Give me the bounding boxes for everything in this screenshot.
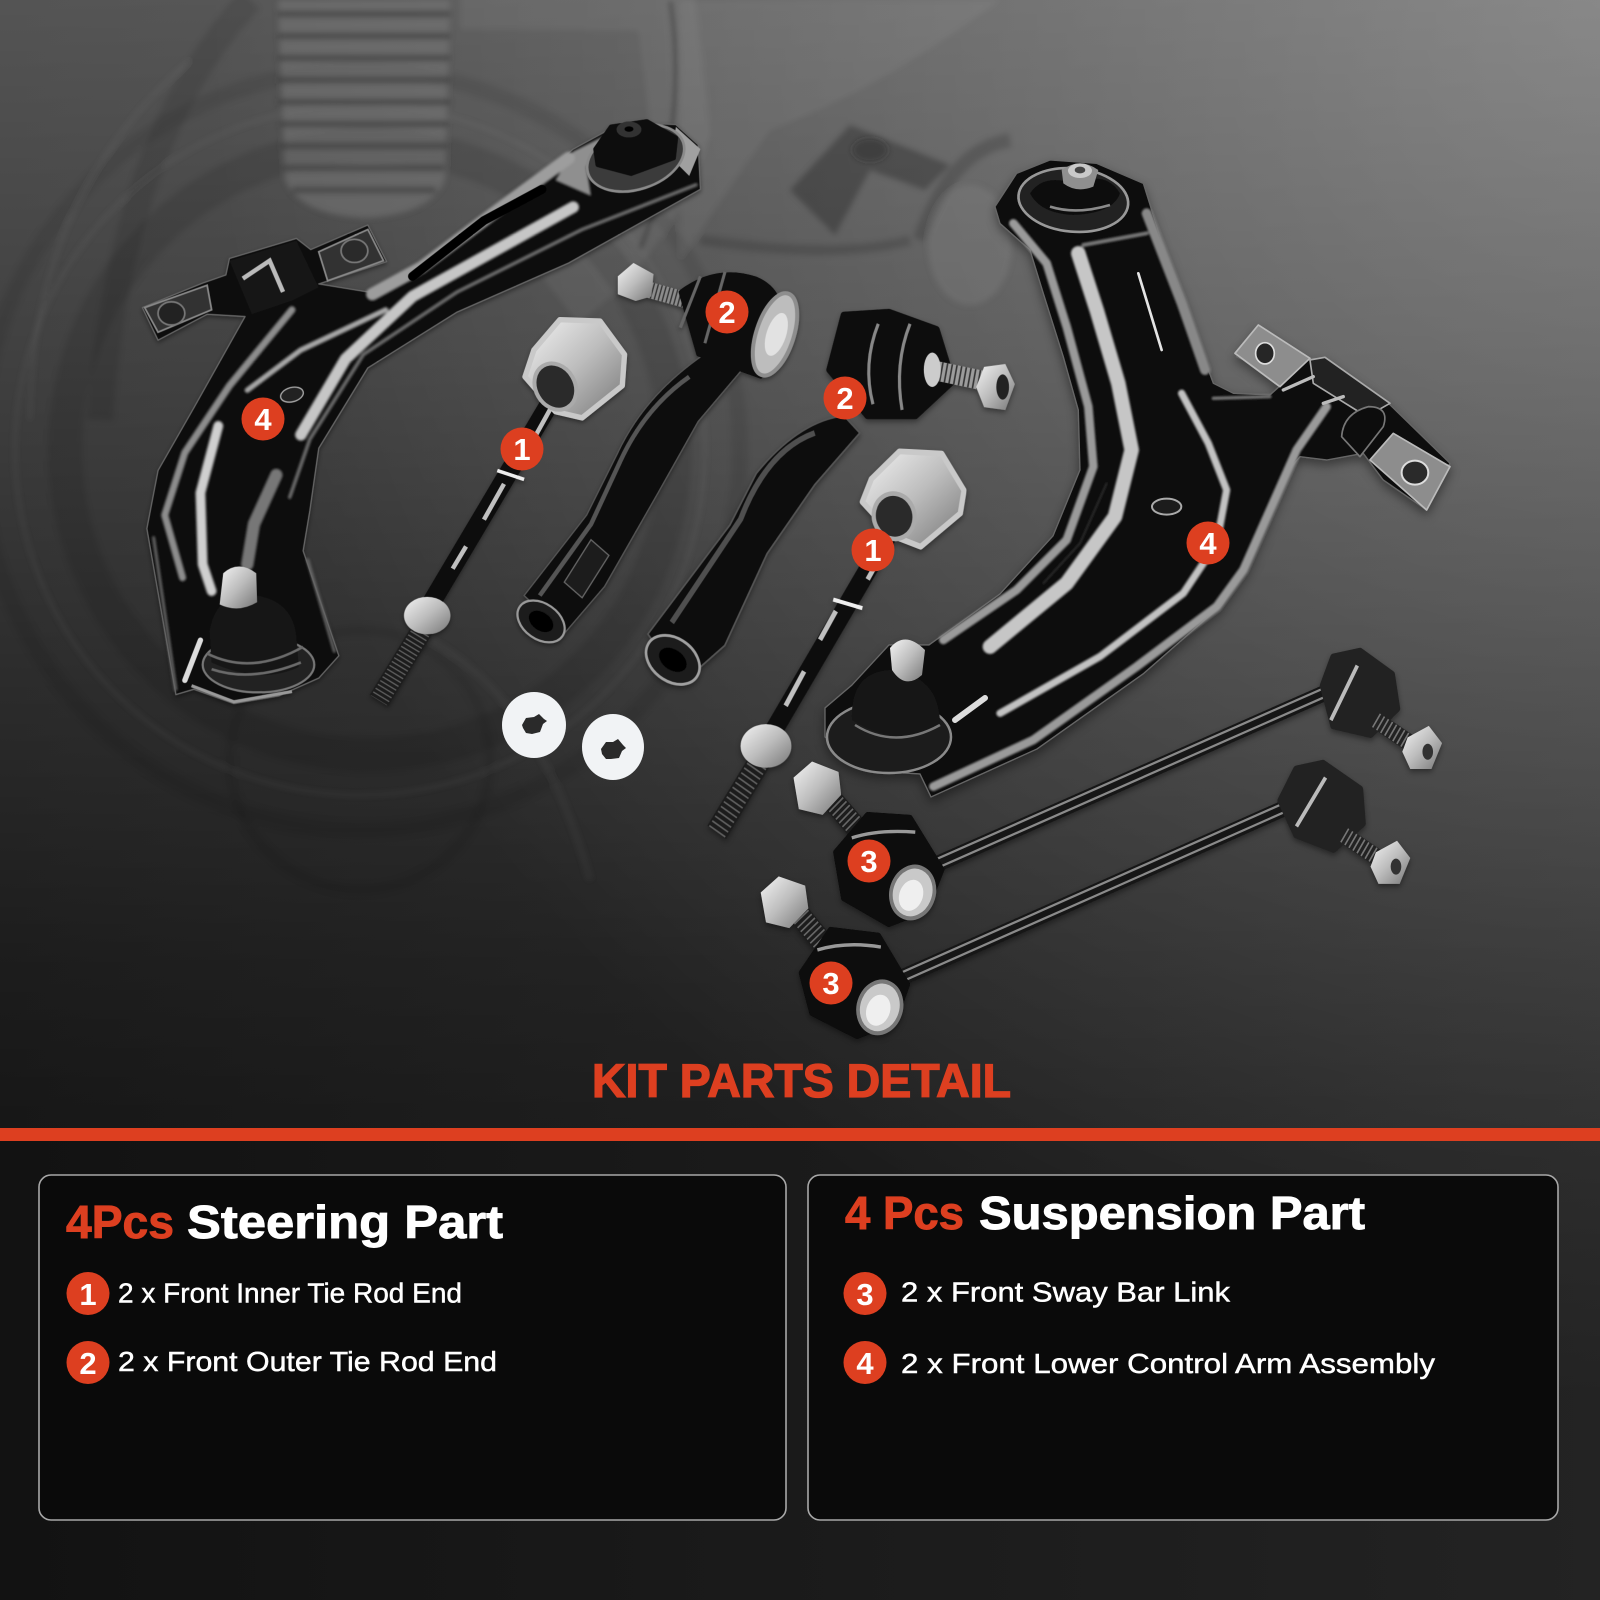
list item 3: 2 x Front Sway Bar Link bbox=[901, 1276, 1231, 1308]
part: lower sway bar link bbox=[761, 763, 1410, 1041]
callout badge 4, right arm bbox=[1186, 522, 1230, 564]
part: inner tie rod, left bbox=[379, 320, 625, 700]
panel heading: 4 Pcs Suspension Part: Suspension Part bbox=[979, 1187, 1365, 1239]
list item 4: 2 x Front Lower Control Arm Assembly bbox=[901, 1348, 1435, 1379]
callout badge 3, lower sway link bbox=[810, 962, 852, 1004]
callout badge 3, lower sway link: 3 bbox=[822, 966, 840, 1001]
callout badge 3, upper sway link: 3 bbox=[860, 844, 878, 879]
callout badge 3, upper sway link bbox=[848, 840, 890, 882]
bushing bbox=[1016, 163, 1131, 236]
panel heading: 4Pcs Steering Part: 4Pcs bbox=[66, 1196, 174, 1248]
list item 2 bbox=[66, 1341, 497, 1384]
callout badge 4, left arm bbox=[242, 398, 284, 440]
mounting tabs and sleeve bbox=[1235, 325, 1450, 510]
background: chassis bracket bbox=[680, 0, 1012, 305]
list item 3: 3 bbox=[856, 1277, 874, 1312]
callout badge 2, left outer tie rod: 2 bbox=[718, 295, 736, 330]
panel heading: 4 Pcs Suspension Part bbox=[845, 1187, 1365, 1239]
part: outer tie rod, left bbox=[510, 263, 806, 651]
panel: suspension part bbox=[808, 1175, 1558, 1520]
callout badge 2, right outer tie rod: 2 bbox=[836, 381, 854, 416]
part: washers bbox=[502, 692, 644, 780]
list item 1: 1 bbox=[79, 1277, 97, 1312]
callout badge 2, left outer tie rod bbox=[706, 290, 748, 334]
part: left lower control arm bbox=[142, 113, 700, 704]
part: outer tie rod, right bbox=[638, 312, 1015, 694]
callout badge 2, right outer tie rod bbox=[824, 376, 866, 420]
callout badge 1, right inner tie rod: 1 bbox=[864, 533, 882, 568]
list item 2: 2 x Front Outer Tie Rod End bbox=[118, 1346, 497, 1377]
panel heading: 4Pcs Steering Part: Steering Part bbox=[187, 1196, 503, 1248]
part: inner tie rod, right bbox=[717, 451, 964, 832]
divider bar bbox=[0, 1128, 1600, 1141]
list item 4 bbox=[844, 1341, 1435, 1384]
ball joint bbox=[203, 566, 314, 692]
callout badge 4, left arm: 4 bbox=[254, 402, 272, 437]
callout badge 1, left inner tie rod: 1 bbox=[513, 432, 531, 467]
part: upper sway bar link bbox=[794, 651, 1442, 926]
callout badge 1, right inner tie rod bbox=[852, 528, 894, 572]
callout badge 1, left inner tie rod bbox=[500, 428, 544, 470]
panel: steering part bbox=[39, 1175, 786, 1520]
panel heading: 4Pcs Steering Part bbox=[66, 1196, 503, 1248]
background: ghosted suspension photo bbox=[0, 0, 1012, 890]
background: coil boot bbox=[278, 0, 450, 218]
panel heading: 4 Pcs Suspension Part: 4 Pcs bbox=[845, 1187, 964, 1239]
part: right lower control arm bbox=[825, 160, 1450, 797]
list item 4: 4 bbox=[856, 1346, 874, 1381]
list item 1: 2 x Front Inner Tie Rod End bbox=[118, 1278, 462, 1308]
callout badge 4, right arm: 4 bbox=[1199, 526, 1217, 561]
bushing bbox=[578, 113, 700, 203]
list item 1 bbox=[66, 1272, 462, 1315]
ball joint bbox=[827, 639, 985, 773]
heading: kit parts detail: KIT PARTS DETAIL bbox=[592, 1054, 1011, 1107]
list item 3 bbox=[844, 1272, 1231, 1315]
list item 2: 2 bbox=[79, 1346, 97, 1381]
